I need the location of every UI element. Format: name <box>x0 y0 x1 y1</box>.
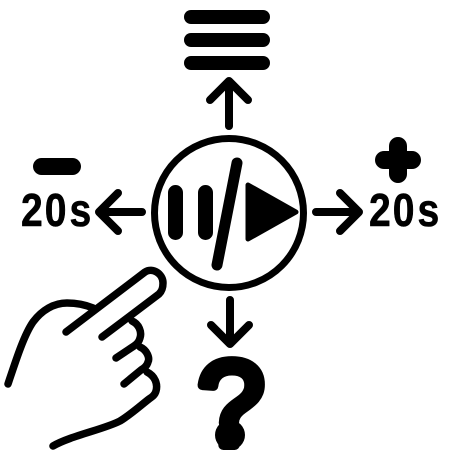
label: minus 20 seconds: 20s <box>21 185 91 237</box>
icon: plus <box>384 146 412 174</box>
icon: menu <box>184 10 270 70</box>
arrow: right <box>316 193 359 231</box>
icon: pointing hand <box>8 270 163 446</box>
play/pause button <box>154 138 304 288</box>
label: plus 20 seconds: 20s <box>369 185 439 237</box>
icon: minus <box>33 158 81 175</box>
arrow: down <box>211 300 249 344</box>
arrow: left <box>99 193 142 231</box>
arrow: up <box>210 81 248 126</box>
